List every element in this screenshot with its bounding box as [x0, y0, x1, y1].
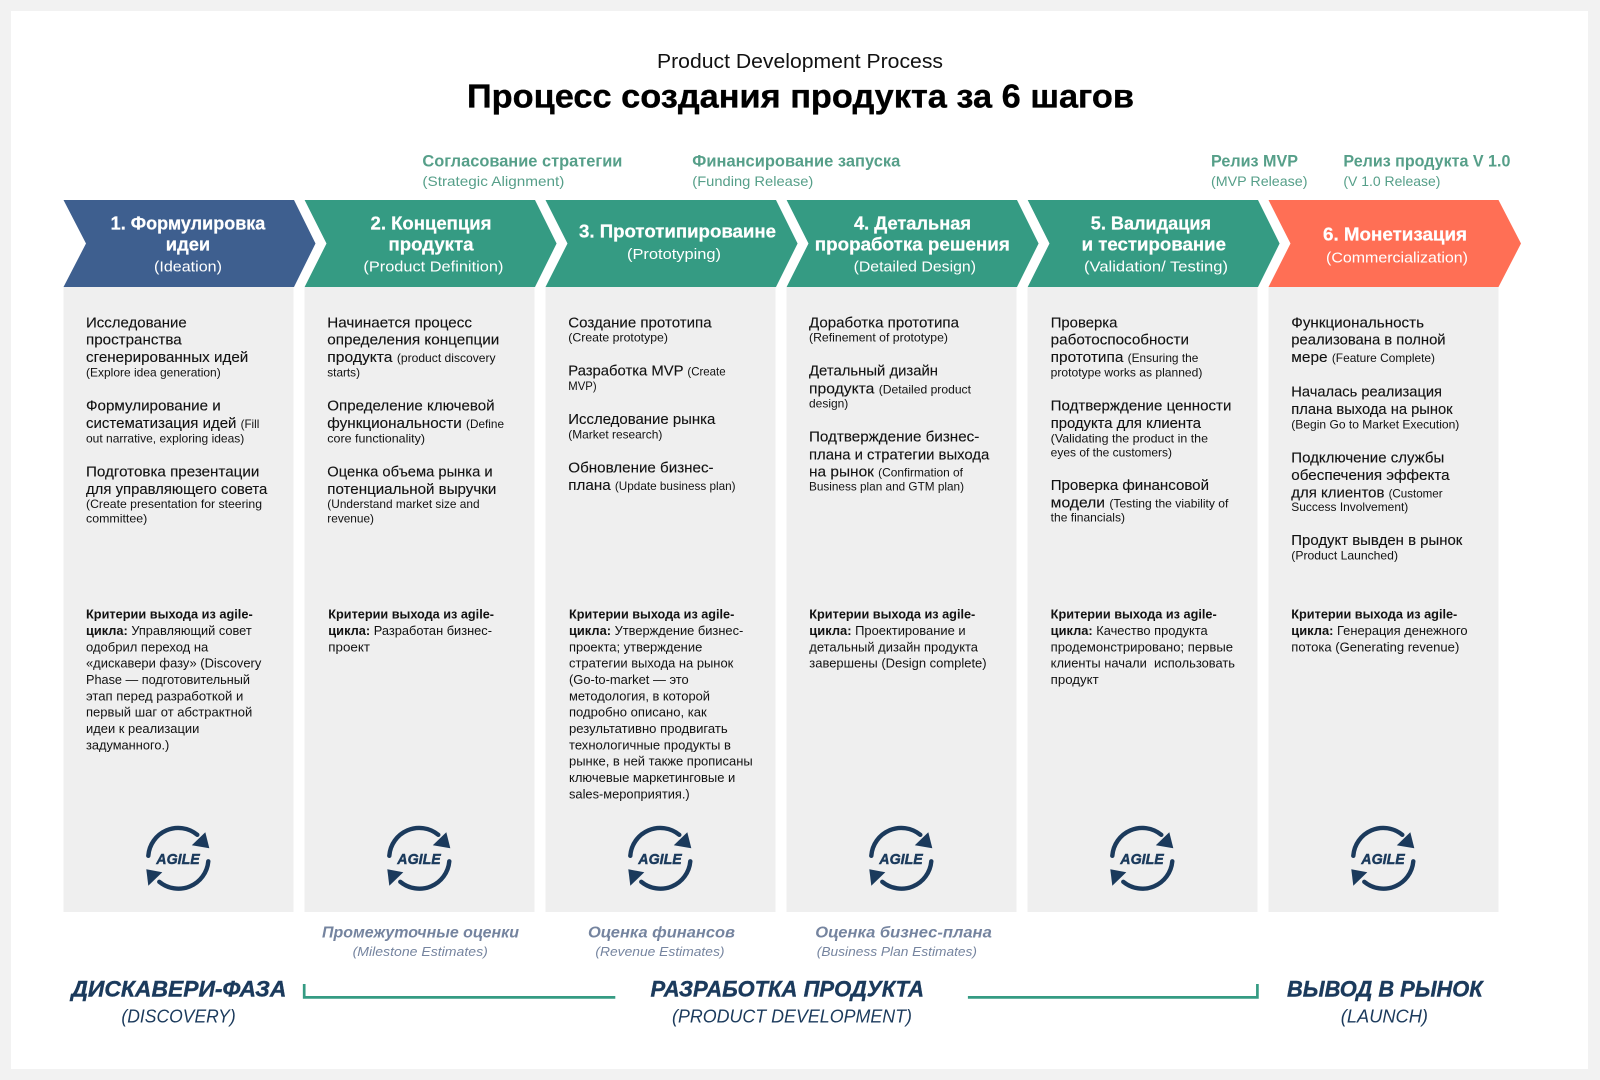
exit criteria: идеи к реализации: [86, 722, 199, 736]
exit criteria: Критерии выхода из agile-: [1051, 608, 1217, 622]
exit criteria: проект: [328, 640, 370, 654]
activities list: Подключение службы: [1291, 449, 1444, 466]
icon: agile cycle: AGILE: [1360, 851, 1406, 868]
exit criteria: цикла: Разработан бизнес-: [328, 624, 492, 638]
chevron 1: ideation: [64, 200, 316, 287]
milestone: strategic alignment: [422, 153, 622, 189]
phase: product development: РАЗРАБОТКА ПРОДУКТА: [650, 976, 924, 1001]
chevron 5: validation and testing: [1028, 200, 1280, 287]
main title: Процесс создания продукта за 6 шагов: [467, 78, 1134, 115]
activities list: сгенерированных идей: [86, 349, 248, 366]
estimate: milestone estimates: Промежуточные оценки: [322, 924, 519, 941]
activities list: обеспечения эффекта: [1291, 467, 1450, 484]
activities list: пространства: [86, 332, 182, 349]
title block: [467, 50, 1134, 115]
activities list: starts): [327, 367, 360, 380]
exit criteria: подробно описано, как: [569, 706, 707, 720]
activities list: eyes of the customers): [1051, 447, 1172, 460]
chevron 2: product definition: 2. Концепция: [370, 213, 492, 233]
activities list: прототипа (Ensuring the: [1051, 349, 1198, 366]
activities list: Создание прототипа: [568, 314, 712, 331]
activities list: продукта (Detailed product: [809, 380, 972, 397]
chevron 5: validation and testing: и тестирование: [1082, 235, 1226, 255]
chevron 3: prototyping: [546, 200, 798, 287]
exit criteria: Phase — подготовительный: [86, 673, 250, 687]
activities list: (Create prototype): [568, 332, 668, 345]
activities list: потенциальной выручки: [327, 481, 496, 498]
chevron 4: detailed design: проработка решения: [815, 235, 1010, 255]
phase: launch: (LAUNCH): [1341, 1005, 1428, 1026]
exit criteria: Критерии выхода из agile-: [569, 608, 734, 622]
chevron 6: commercialization: (Commercialization): [1326, 250, 1468, 266]
activities list: продукта для клиента: [1051, 415, 1202, 432]
activities list: (Understand market size and: [327, 498, 480, 511]
activities list: Исследование: [86, 314, 187, 331]
activities list: (Create presentation for steering: [86, 498, 262, 511]
icon: agile cycle: [1110, 828, 1173, 889]
activities list: Success Involvement): [1291, 501, 1408, 514]
icon: agile cycle: AGILE: [155, 851, 201, 868]
activities list: функциональности (Define: [327, 415, 504, 432]
exit criteria: [1051, 608, 1235, 687]
icon: agile cycle: [1351, 828, 1414, 889]
activities list: Определение ключевой: [327, 398, 495, 415]
subtitle: Product Development Process: [657, 50, 943, 73]
milestone: funding release: Финансирование запуска: [692, 153, 901, 171]
exit criteria: методология, в которой: [569, 689, 710, 703]
activities list: (Explore idea generation): [86, 367, 221, 380]
estimate: milestone estimates: [322, 924, 519, 959]
phase: launch: ВЫВОД В РЫНОК: [1287, 976, 1484, 1001]
exit criteria: результативно продвигать: [569, 722, 728, 736]
activities list: продукта (product discovery: [327, 349, 496, 366]
chevron 3: prototyping: (Prototyping): [627, 246, 721, 263]
bracket: product development left: [304, 984, 615, 997]
chevron 5: validation and testing: (Validation/ Testing): [1084, 259, 1228, 276]
milestone: V 1.0 release: [1343, 153, 1510, 189]
activities list: Функциональность: [1291, 314, 1424, 331]
exit criteria: [328, 608, 494, 654]
milestone: MVP release: Релиз MVP: [1211, 153, 1298, 171]
chevron 3: prototyping: 3. Прототипироваине: [579, 221, 776, 241]
exit criteria: рынке, в ней также прописаны: [569, 755, 753, 769]
activities list: Началась реализация: [1291, 384, 1442, 401]
activities list: MVP): [568, 380, 597, 393]
activities list: модели (Testing the viability of: [1051, 494, 1229, 511]
milestone: funding release: (Funding Release): [692, 173, 813, 189]
exit criteria: цикла: Качество продукта: [1051, 624, 1208, 638]
exit criteria: sales-мероприятия.): [569, 787, 690, 801]
activities list: revenue): [327, 513, 374, 526]
milestone: MVP release: [1211, 153, 1308, 189]
activities list: (Market research): [568, 428, 662, 441]
exit criteria: одобрил переход на: [86, 640, 208, 654]
activities list: Исследование рынка: [568, 411, 716, 428]
activities list: [1291, 314, 1463, 562]
exit criteria: цикла: Генерация денежного: [1291, 624, 1468, 638]
exit criteria: технологичные продукты в: [569, 738, 731, 752]
phase: discovery: (DISCOVERY): [121, 1005, 236, 1026]
phase: product development: (PRODUCT DEVELOPMENT): [672, 1005, 912, 1026]
icon: agile cycle: [146, 828, 209, 889]
exit criteria: стратегии выхода на рынок: [569, 657, 734, 671]
panel 5: validation and testing: [1028, 287, 1258, 912]
exit criteria: [1291, 608, 1468, 654]
exit criteria: «дискавери фазу» (Discovery: [86, 657, 262, 671]
activities list: мере (Feature Complete): [1291, 349, 1435, 366]
activities list: [86, 314, 268, 526]
activities list: prototype works as planned): [1051, 367, 1203, 380]
exit criteria: первый шаг от абстрактной: [86, 706, 252, 720]
exit criteria: (Go-to-market — это: [569, 673, 689, 687]
icon: agile cycle: AGILE: [1119, 851, 1165, 868]
activities list: для клиентов (Customer: [1291, 484, 1443, 501]
exit criteria: цикла: Управляющий совет: [86, 624, 252, 638]
estimate: milestone estimates: (Milestone Estimates): [353, 944, 488, 959]
exit criteria: ключевые маркетинговые и: [569, 771, 735, 785]
activities list: Детальный дизайн: [809, 363, 938, 380]
chevron 2: product definition: продукта: [388, 235, 475, 255]
bracket: product development right: [968, 984, 1257, 997]
chevron 2: product definition: [305, 200, 557, 287]
activities list: design): [809, 397, 848, 410]
activities list: плана (Update business plan): [568, 477, 736, 494]
activities list: работоспособности: [1051, 332, 1189, 349]
activities list: Оценка объема рынка и: [327, 464, 493, 481]
phase: discovery: ДИСКАВЕРИ-ФАЗА: [69, 976, 286, 1001]
icon: agile cycle: [387, 828, 450, 889]
chevron 1: ideation: (Ideation): [154, 259, 222, 276]
chevron 4: detailed design: [787, 200, 1039, 287]
exit criteria: клиенты начали использовать: [1051, 657, 1235, 671]
activities list: определения концепции: [327, 332, 499, 349]
panel 6: commercialization: [1268, 287, 1498, 912]
activities list: Business plan and GTM plan): [809, 481, 964, 494]
exit criteria: Критерии выхода из agile-: [328, 608, 494, 622]
activities list: [1051, 314, 1231, 525]
exit criteria: продукт: [1051, 673, 1099, 687]
panel 4: detailed design: [786, 287, 1016, 912]
exit criteria: этап перед разработкой и: [86, 689, 243, 703]
activities list: реализована в полной: [1291, 332, 1446, 349]
icon: agile cycle: [628, 828, 691, 889]
phase: launch: [1287, 976, 1484, 1026]
activities list: (Validating the product in the: [1051, 433, 1208, 446]
activities list: [327, 314, 504, 526]
activities list: (Product Launched): [1291, 549, 1398, 562]
activities list: плана выхода на рынок: [1291, 401, 1453, 418]
estimate: business plan estimates: [815, 924, 992, 959]
chevron 4: detailed design: 4. Детальная: [854, 213, 971, 233]
exit criteria: детальный дизайн продукта: [809, 640, 978, 654]
chevron 6: commercialization: 6. Монетизация: [1323, 225, 1467, 245]
activities list: Подтверждение ценности: [1051, 398, 1231, 415]
estimate: business plan estimates: (Business Plan Estimates): [817, 944, 977, 959]
activities list: committee): [86, 513, 147, 526]
chevron 6: commercialization: [1268, 200, 1521, 287]
chevron 1: ideation: 1. Формулировка: [111, 213, 266, 233]
phase: discovery: [69, 976, 286, 1026]
estimate: revenue estimates: [588, 924, 735, 959]
icon: agile cycle: AGILE: [637, 851, 683, 868]
activities list: Разработка MVP (Create: [568, 363, 726, 380]
icon: agile cycle: AGILE: [878, 851, 924, 868]
activities list: out narrative, exploring ideas): [86, 433, 244, 446]
exit criteria: Критерии выхода из agile-: [809, 608, 975, 622]
icon: agile cycle: AGILE: [396, 851, 442, 868]
chevron 5: validation and testing: 5. Валидация: [1091, 213, 1211, 233]
activities list: для управляющего совета: [86, 481, 268, 498]
exit criteria: продемонстрировано; первые: [1051, 640, 1233, 654]
exit criteria: цикла: Утверждение бизнес-: [569, 624, 743, 638]
exit criteria: [86, 608, 262, 752]
icon: agile cycle: [869, 828, 932, 889]
activities list: [809, 314, 990, 494]
panel 2: product definition: [304, 287, 534, 912]
milestone: V 1.0 release: (V 1.0 Release): [1343, 173, 1440, 189]
activities list: Обновление бизнес-: [568, 459, 714, 476]
activities list: Начинается процесс: [327, 314, 473, 331]
exit criteria: Критерии выхода из agile-: [86, 608, 253, 622]
milestone: V 1.0 release: Релиз продукта V 1.0: [1343, 153, 1510, 171]
chevron 1: ideation: идеи: [166, 235, 210, 255]
milestone: strategic alignment: (Strategic Alignment): [422, 173, 564, 189]
panel 1: ideation: [64, 287, 294, 912]
milestone: MVP release: (MVP Release): [1211, 173, 1308, 189]
estimate: revenue estimates: Оценка финансов: [588, 924, 735, 941]
exit criteria: завершены (Design complete): [809, 657, 987, 671]
estimate: business plan estimates: Оценка бизнес-плана: [815, 924, 992, 941]
exit criteria: потока (Generating revenue): [1291, 640, 1459, 654]
activities list: (Refinement of prototype): [809, 332, 948, 345]
chevron 2: product definition: (Product Definition): [363, 259, 503, 276]
panel 3: prototyping: [546, 287, 776, 912]
milestone: strategic alignment: Согласование стратегии: [422, 153, 622, 171]
exit criteria: цикла: Проектирование и: [809, 624, 966, 638]
exit criteria: проекта; утверждение: [569, 640, 702, 654]
exit criteria: [809, 608, 987, 671]
activities list: [568, 314, 736, 494]
activities list: на рынок (Confirmation of: [809, 464, 964, 481]
exit criteria: Критерии выхода из agile-: [1291, 608, 1457, 622]
activities list: (Begin Go to Market Execution): [1291, 418, 1459, 431]
activities list: the financials): [1051, 512, 1125, 525]
activities list: Подготовка презентации: [86, 464, 259, 481]
activities list: Формулирование и: [86, 398, 221, 415]
activities list: Проверка: [1051, 314, 1118, 331]
activities list: Подтверждение бизнес-: [809, 429, 979, 446]
phase: product development: [650, 976, 924, 1026]
exit criteria: [569, 608, 753, 801]
estimate: revenue estimates: (Revenue Estimates): [595, 944, 724, 959]
activities list: core functionality): [327, 433, 425, 446]
milestone: funding release: [692, 153, 901, 189]
chevron 4: detailed design: (Detailed Design): [854, 259, 976, 276]
activities list: систематизация идей (Fill: [86, 415, 259, 432]
activities list: Проверка финансовой: [1051, 477, 1209, 494]
activities list: плана и стратегии выхода: [809, 446, 990, 463]
activities list: Продукт вывден в рынок: [1291, 532, 1463, 549]
exit criteria: задуманного.): [86, 738, 169, 752]
activities list: Доработка прототипа: [809, 314, 960, 331]
